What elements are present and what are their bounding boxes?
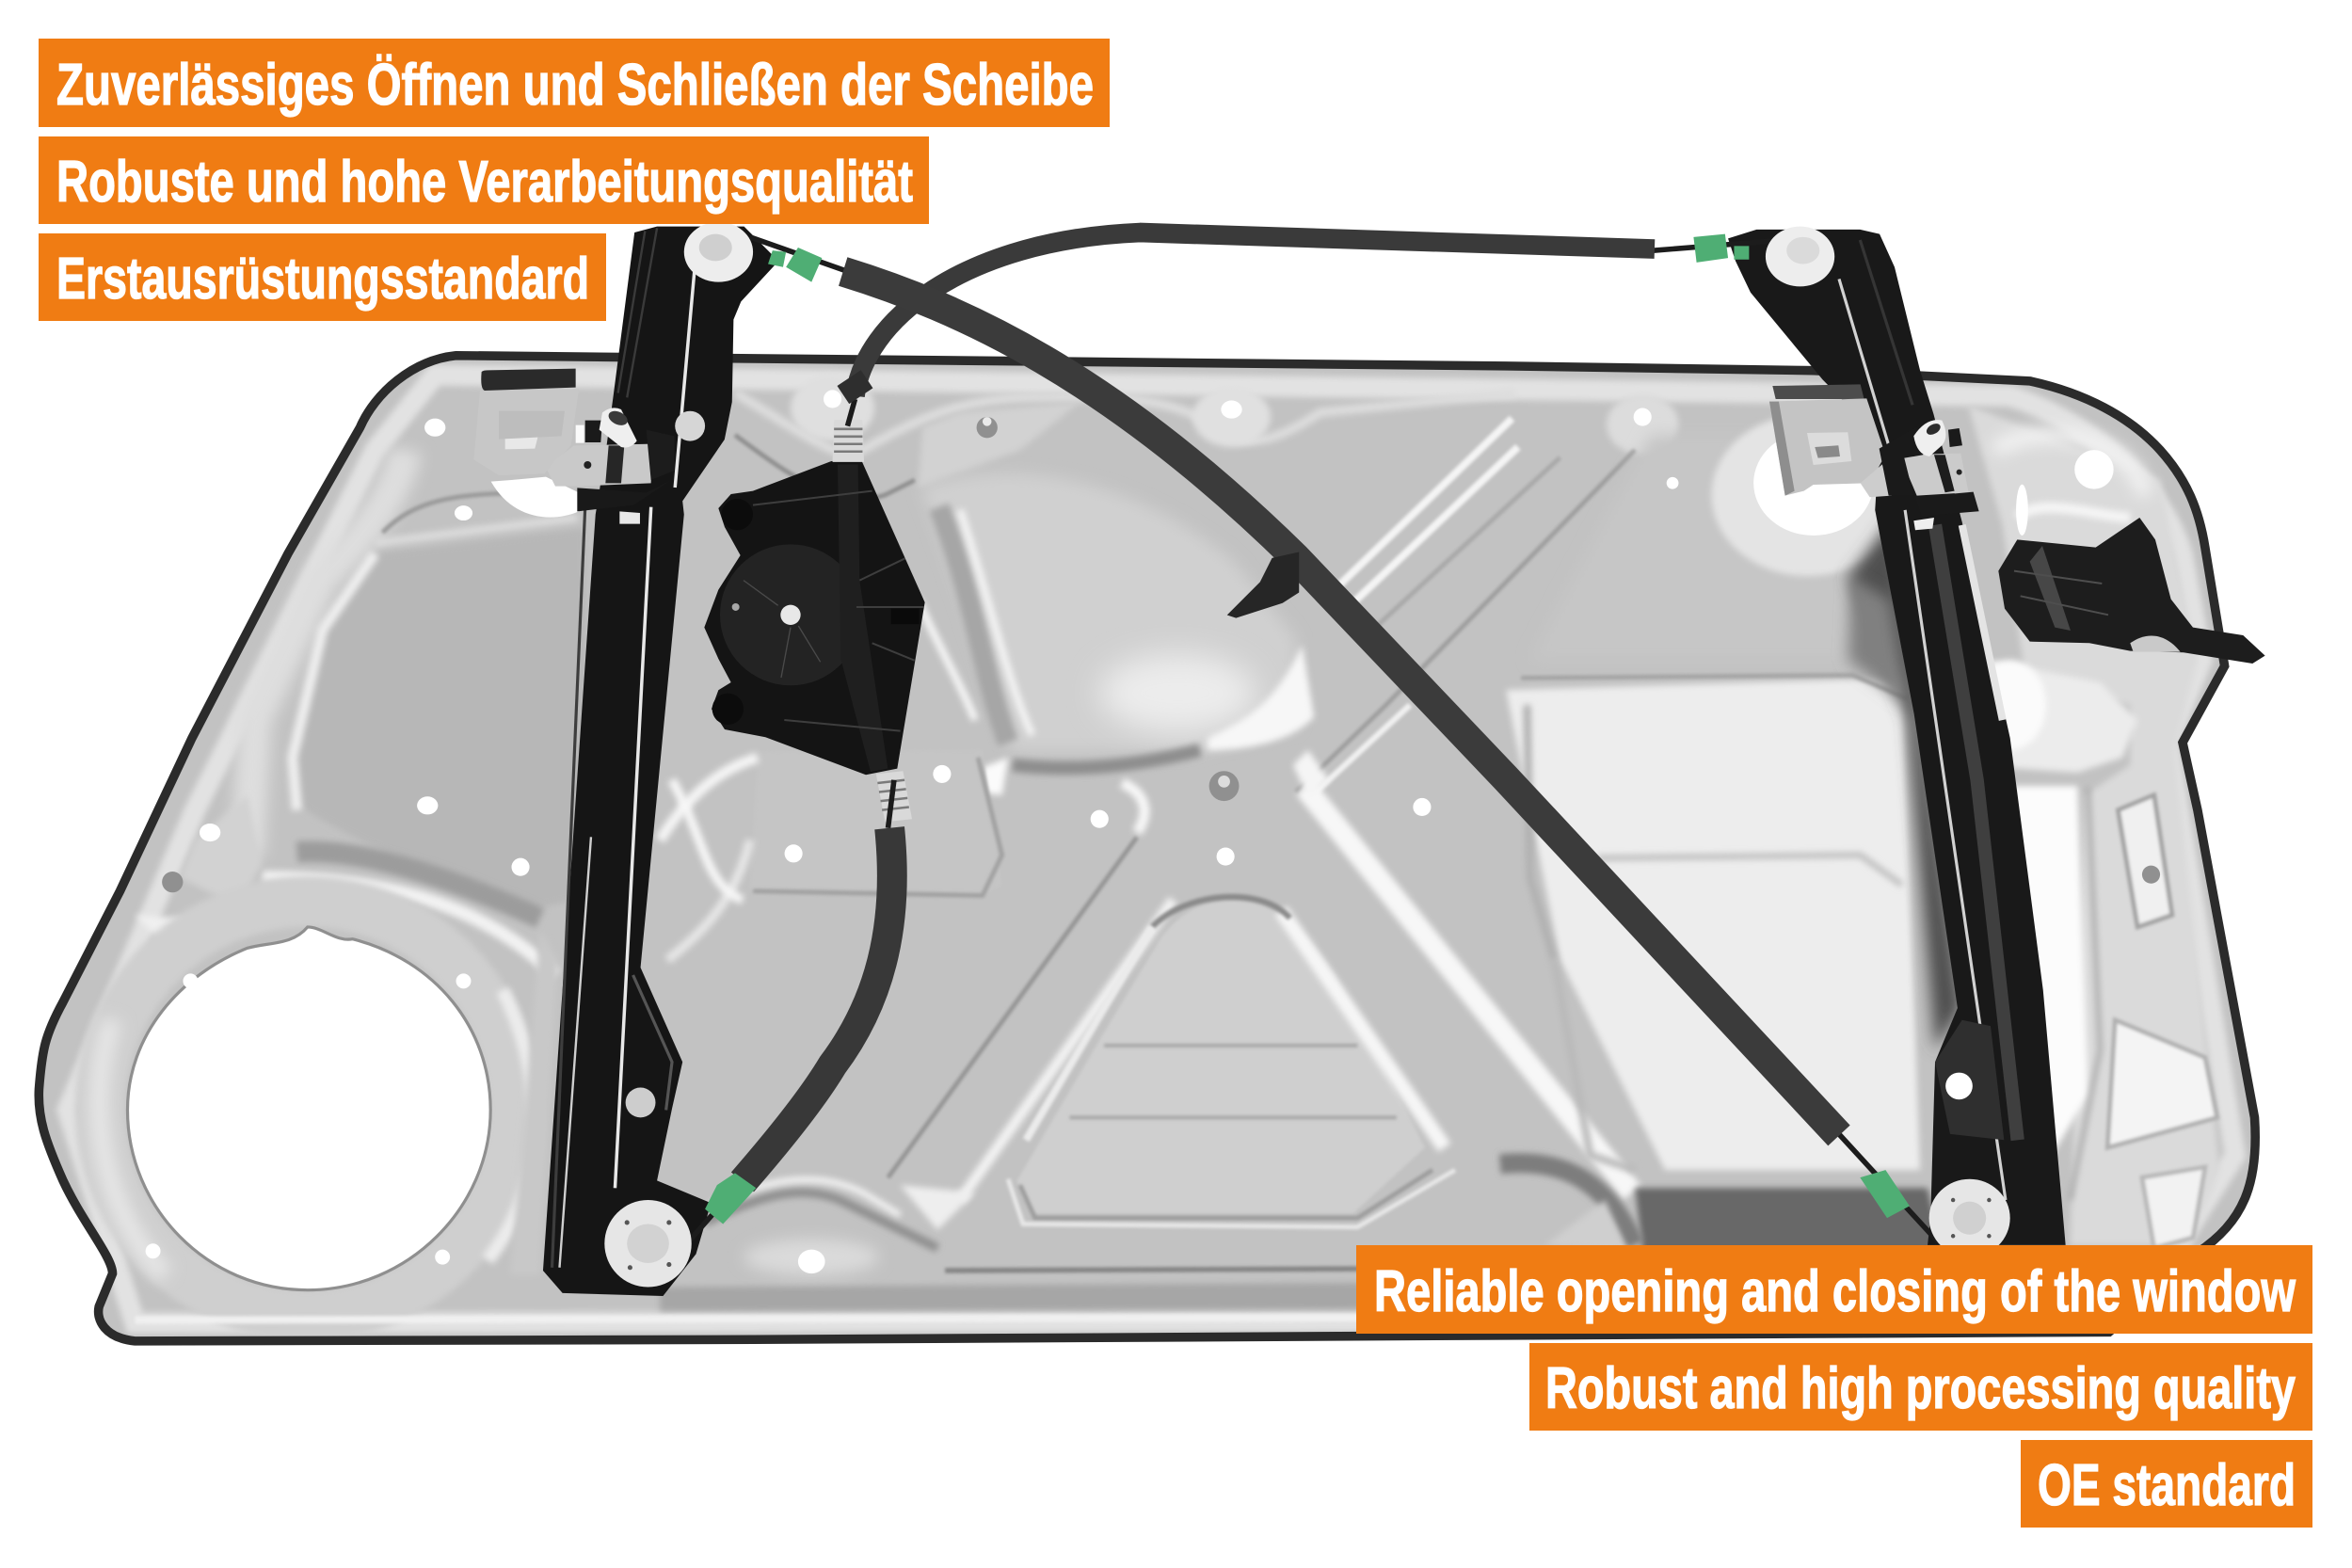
callouts: English <box>1356 1245 2312 1528</box>
callout: reliable opening (en) <box>1356 1245 2312 1334</box>
dimples <box>1192 387 1271 447</box>
sleeve: upper arc <box>855 232 1655 396</box>
callout: OE standard (en) <box>2021 1440 2312 1528</box>
callout: OE standard (de): Erstausrüstungsstandard <box>56 247 589 312</box>
black plastic carrier with strap <box>1998 518 2265 664</box>
mounting holes <box>146 390 2160 1273</box>
area above window <box>1640 433 1673 454</box>
lower-left bump <box>705 1192 937 1248</box>
cable springs <box>833 420 912 822</box>
bolt heads <box>162 417 2160 892</box>
door panel <box>39 356 2255 1341</box>
callout: robust quality (de): Robuste und hohe Verarbeitungsqualität <box>56 150 913 215</box>
bracket: right <box>1769 384 1979 530</box>
cable tie <box>1227 552 1299 618</box>
right zone <box>1968 405 2220 1245</box>
centre top panel <box>921 474 1296 751</box>
window area <box>1506 678 1920 1170</box>
callout: reliable opening (de): Zuverlässiges Öffnen und Schließen der Scheibe <box>56 53 1094 118</box>
right arm <box>1305 788 1632 1192</box>
clip: bottom right <box>1860 1170 1910 1218</box>
window rail: left <box>543 227 778 1296</box>
panel: embossed shading <box>68 375 2235 1323</box>
lower-left rectangular pressing <box>973 765 990 796</box>
right opening <box>1753 430 1874 536</box>
clip: top left <box>768 248 822 282</box>
upper right arm <box>1338 419 1512 586</box>
left arm <box>888 837 1137 1177</box>
window rail: right <box>1728 230 2066 1245</box>
clip: top right <box>1693 234 1749 263</box>
callout: reliable opening (de) <box>39 39 1110 127</box>
green clips <box>705 234 1910 1224</box>
panel: rubber edge seal <box>39 356 2255 1341</box>
panel: sheet metal body <box>39 356 2255 1341</box>
clip: bottom left <box>705 1173 756 1224</box>
callout: OE standard (de) <box>39 233 606 321</box>
motor housing <box>704 459 925 775</box>
bracket handle <box>481 369 576 391</box>
pulleys <box>604 222 2010 1287</box>
callout: robust quality (de) <box>39 136 929 224</box>
bracket hole <box>491 477 579 518</box>
bracket plate <box>473 389 579 475</box>
shadow along right rail <box>1848 518 1962 1050</box>
bracket: left <box>473 369 675 524</box>
dark band below window <box>1635 1188 1943 1253</box>
speaker ring <box>101 902 515 1316</box>
triangular stamping <box>1008 897 1455 1227</box>
thin cables <box>675 237 1938 1257</box>
cable sleeves <box>675 232 1938 1257</box>
lower band <box>512 951 557 1232</box>
callouts: German <box>39 39 1110 321</box>
speaker opening <box>127 927 490 1290</box>
top pressing rib <box>735 393 1515 454</box>
sleeve: lower left <box>743 828 892 1182</box>
sleeve: long diagonal <box>843 271 1839 1136</box>
left flat panel <box>293 528 588 910</box>
